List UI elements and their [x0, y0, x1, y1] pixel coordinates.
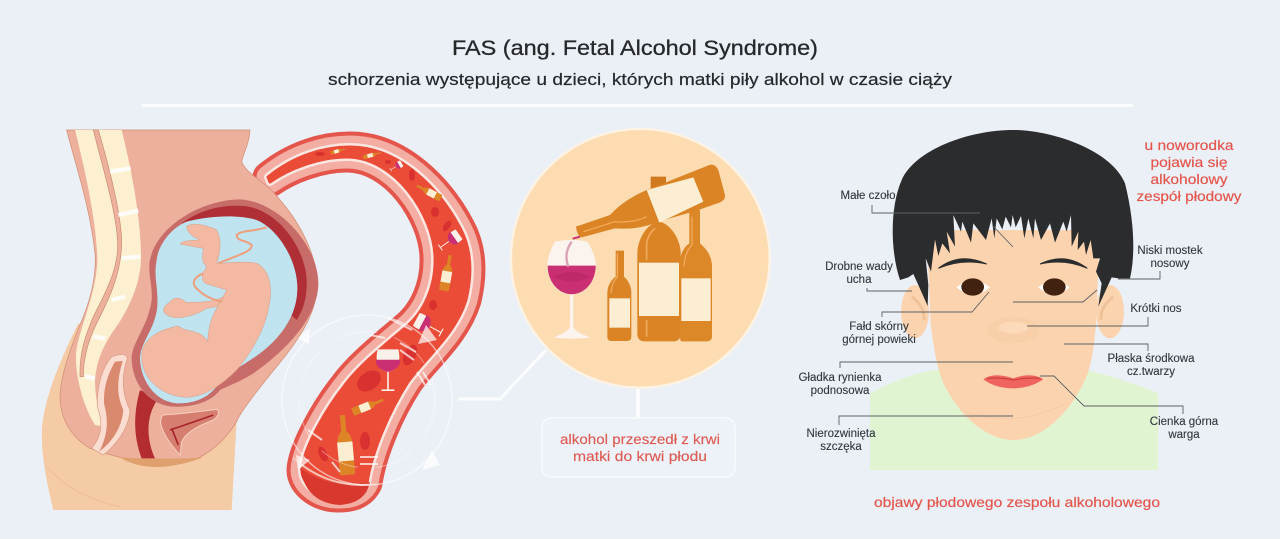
artery end cap shading: [300, 468, 370, 505]
callout: newborn syndrome: u noworodka: [1144, 137, 1234, 153]
label: low nasal bridge: nosowy: [1150, 258, 1190, 270]
label: underdeveloped jaw: [806, 416, 1013, 453]
label: smooth philtrum: podnosowa: [811, 385, 870, 397]
callout: alcohol passes to fetal blood: alkohol przeszedł z krwi: [560, 431, 720, 447]
birth canal: [135, 390, 158, 458]
label: short nose: Krótki nos: [1130, 303, 1182, 315]
label: minor ear defects: [825, 261, 912, 291]
label: upper eyelid fold: [842, 292, 989, 346]
connector to alcohol circle: [458, 350, 546, 399]
shirt: [870, 370, 1158, 470]
spine: [75, 130, 141, 427]
subtitle: schorzenia występujące u dzieci, których matki piły alkohol w czasie ciąży: [328, 71, 953, 89]
label: smooth philtrum: Gładka rynienka: [798, 372, 882, 384]
uterus: [132, 199, 318, 407]
ears: [901, 285, 929, 338]
label: underdeveloped jaw: Nierozwinięta: [806, 428, 876, 440]
callout: newborn syndrome: pojawia się: [1150, 154, 1228, 170]
mother's body cross-section: [42, 130, 318, 510]
perineum: [120, 457, 203, 467]
child's face illustration: [870, 130, 1158, 470]
fetus: [142, 224, 271, 397]
label: upper eyelid fold: górnej powieki: [842, 334, 916, 346]
lower body skin: [42, 323, 237, 510]
label: flat midface: [1064, 344, 1195, 378]
label: flat midface: cz.twarzy: [1127, 366, 1175, 378]
pouring bottle: [573, 165, 725, 239]
label: thin upper lip: warga: [1167, 429, 1200, 441]
callout: newborn syndrome: zespół płodowy: [1136, 188, 1242, 204]
label: short nose: [1027, 303, 1182, 326]
title: FAS (ang. Fetal Alcohol Syndrome): [452, 37, 818, 60]
hair, eyes and eyebrows: [893, 130, 1133, 307]
face: [927, 230, 1100, 440]
callout: newborn syndrome: [1136, 137, 1242, 204]
fetus arm: [164, 297, 223, 318]
label: low nasal bridge: [1013, 245, 1203, 302]
alcohol circle illustration: [511, 129, 770, 388]
label: small forehead: Małe czoło: [841, 190, 895, 202]
label: low nasal bridge: Niski mostek: [1137, 245, 1203, 257]
label: smooth philtrum: [798, 362, 1013, 397]
amniotic sac: [140, 216, 297, 403]
callout: alcohol passes to fetal blood: matki do krwi płodu: [573, 448, 707, 464]
icons: wine glasses in blood: [376, 160, 463, 390]
label: minor ear defects: Drobne wady: [825, 261, 893, 273]
umbilical cord: [194, 227, 267, 302]
caption: symptoms: objawy płodowego zespołu alkoholowego: [874, 494, 1160, 510]
artery with alcohol in blood: [268, 147, 470, 505]
label: underdeveloped jaw: szczęka: [820, 441, 862, 453]
bladder: [161, 409, 219, 455]
circulation rings and arrows: [282, 315, 452, 485]
label: minor ear defects: ucha: [847, 274, 872, 286]
large bottle: [637, 177, 681, 341]
callout: alcohol passes to fetal blood: [542, 418, 735, 477]
rectum: [92, 355, 130, 455]
label: thin upper lip: Cienka górna: [1150, 416, 1219, 428]
nose: [987, 317, 1039, 343]
label: upper eyelid fold: Fałd skórny: [849, 321, 909, 333]
tall bottle: [680, 210, 712, 341]
vertebra marks: [85, 168, 140, 378]
torso: [60, 130, 317, 464]
label: flat midface: Płaska środkowa: [1108, 353, 1195, 365]
wine glass: [547, 240, 596, 339]
blood cells: [315, 152, 453, 463]
lips: [983, 375, 1043, 388]
icons: bottles in blood: [330, 147, 455, 476]
label: thin upper lip: [1040, 376, 1219, 441]
placenta: [182, 206, 307, 320]
callout: newborn syndrome: alkoholowy: [1150, 171, 1228, 187]
small bottle: [607, 251, 631, 341]
label: small forehead: [841, 190, 1013, 247]
